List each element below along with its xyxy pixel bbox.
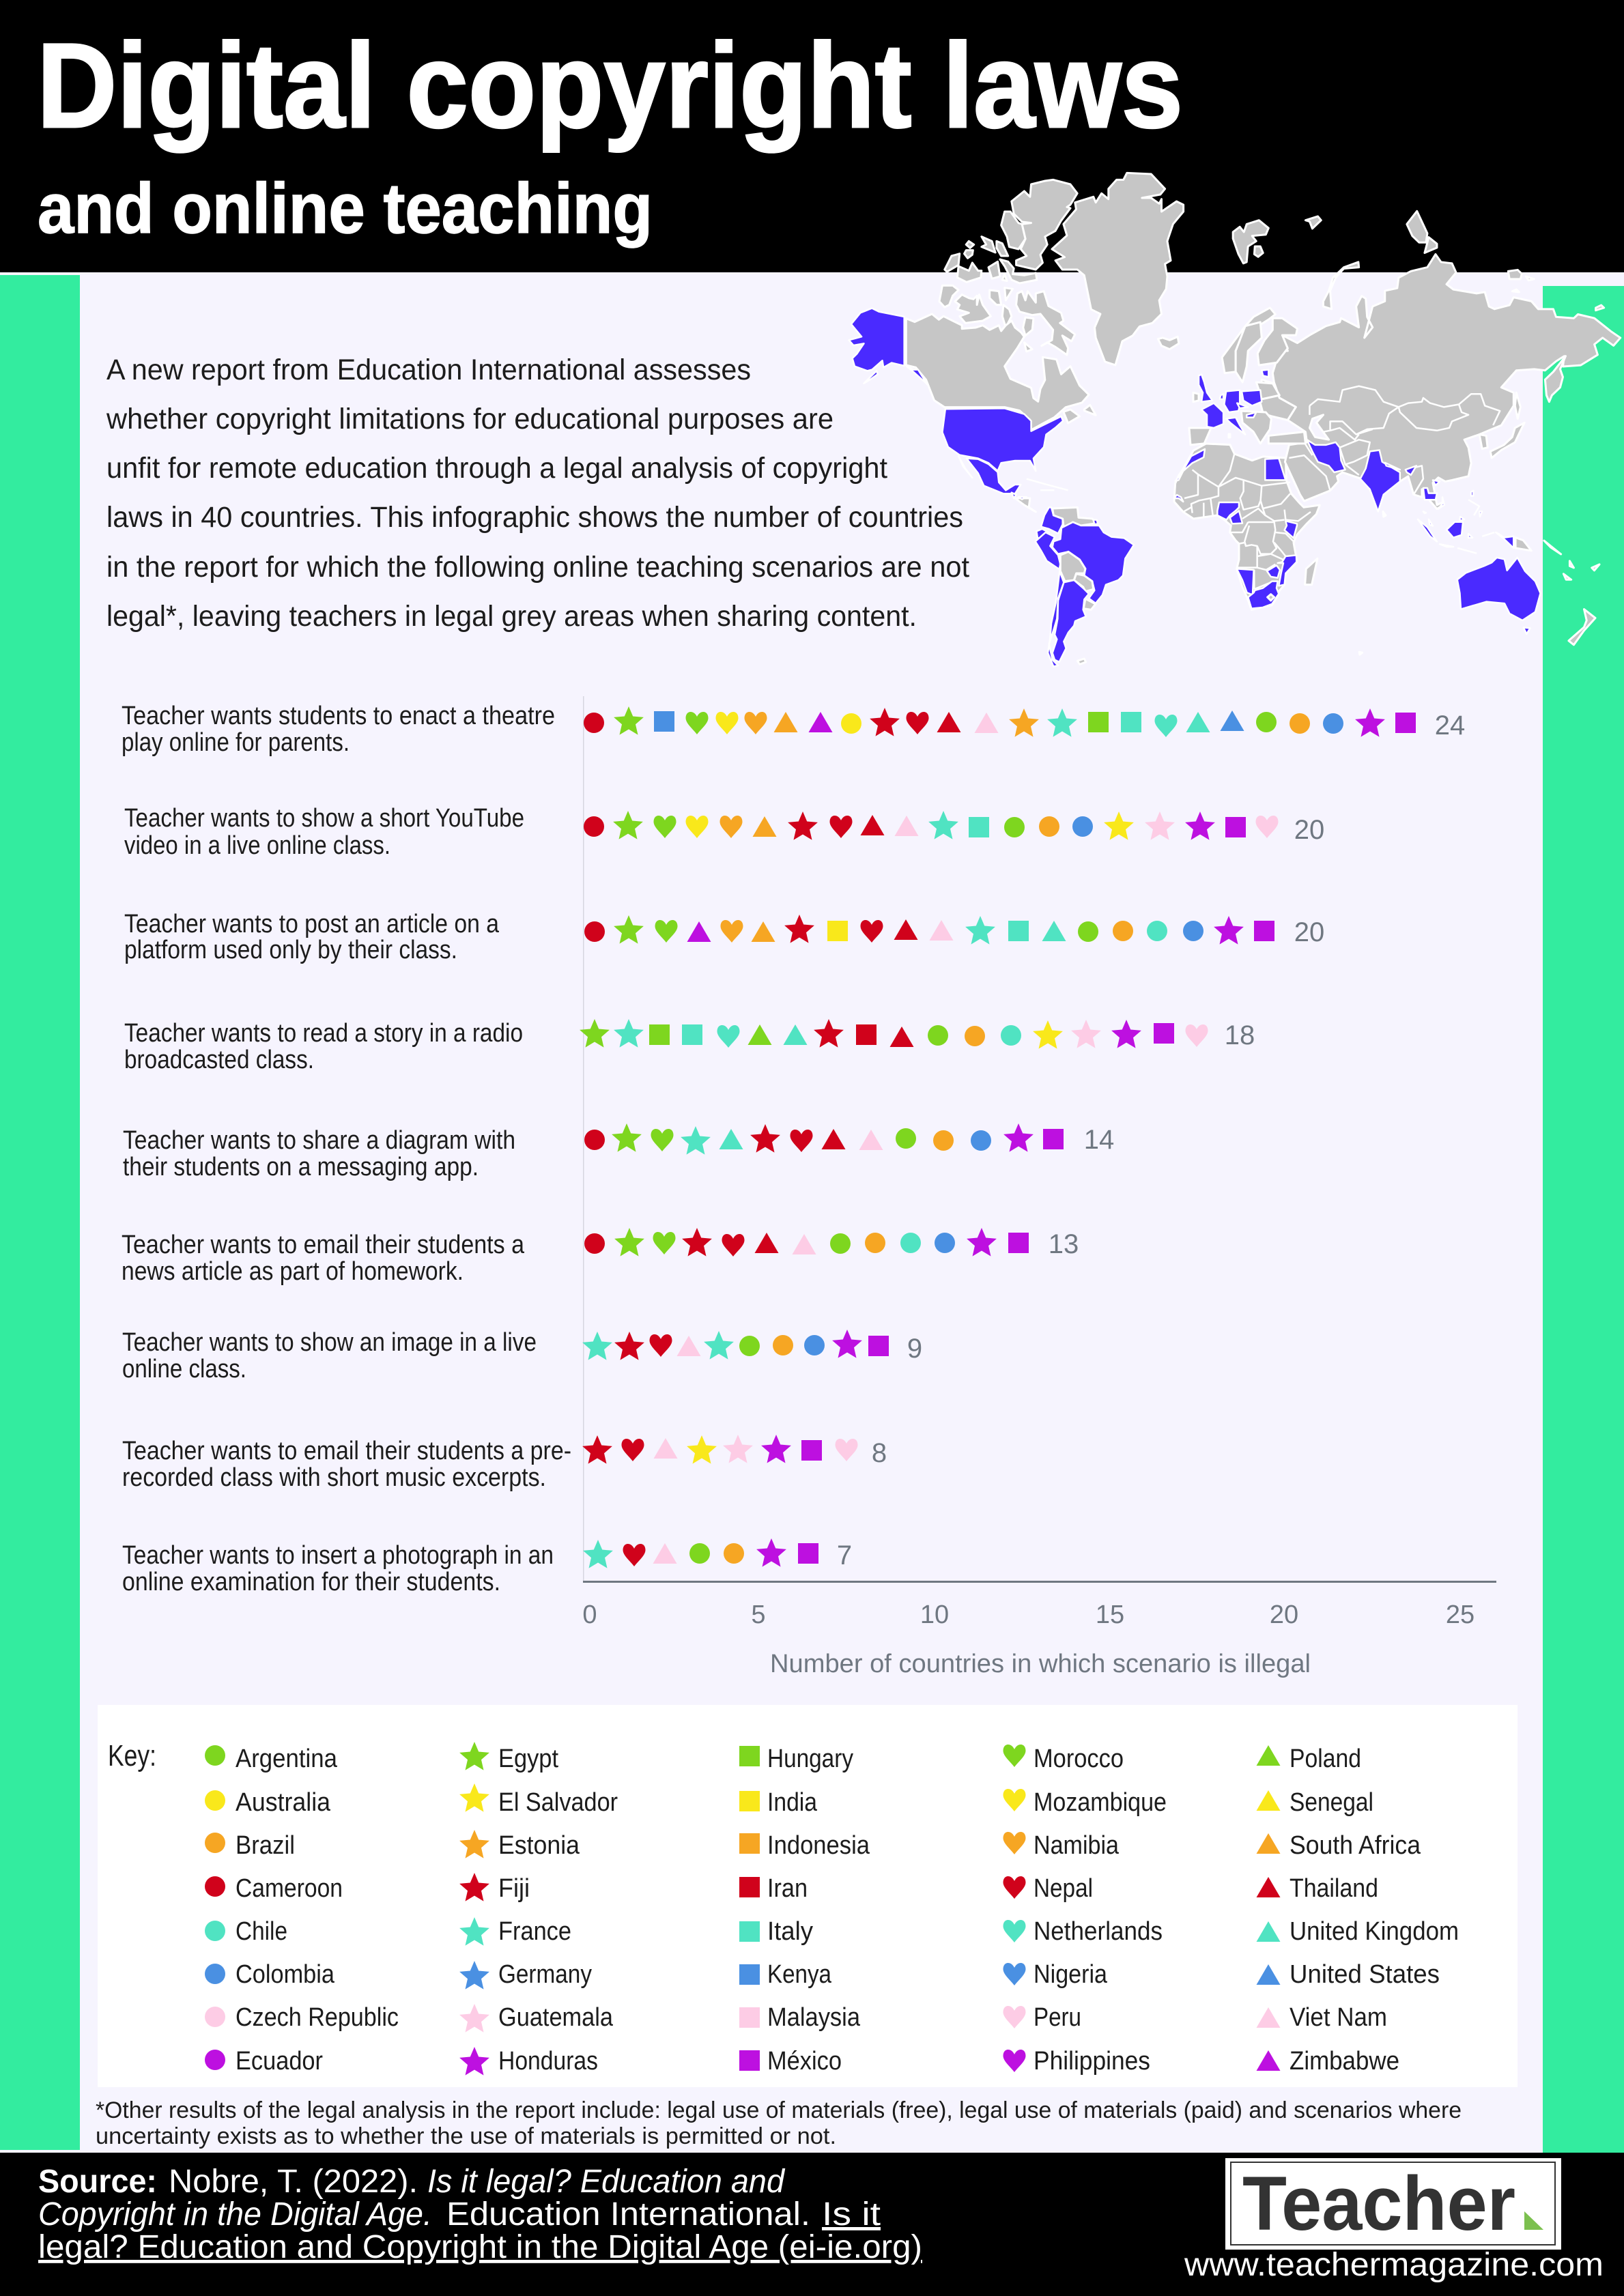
key column: stars: Estonia — [498, 1831, 580, 1860]
Eastern Europe — [1260, 379, 1296, 420]
Sweden — [1236, 322, 1262, 382]
Turkey — [1268, 432, 1305, 444]
row 4: 18 — [1225, 1020, 1255, 1050]
key column: squares: Malaysia — [767, 2003, 861, 2032]
Australia — [1457, 558, 1541, 620]
Spain and Portugal — [1189, 428, 1211, 445]
right green bar — [1543, 286, 1624, 2153]
UK — [1199, 375, 1212, 402]
row 6: news article as part of homework. — [122, 1257, 464, 1286]
world map — [849, 173, 1621, 667]
intro text — [106, 354, 969, 633]
Teacher logo: Teacher — [1242, 2161, 1515, 2246]
row 9: Teacher wants to insert a photograph in an — [122, 1541, 554, 1570]
key column: stars — [459, 1742, 618, 2076]
row 1 — [122, 702, 1465, 757]
Zimbabwe — [1267, 565, 1280, 578]
row 5: Teacher wants to share a diagram with — [123, 1126, 515, 1155]
row 9 — [122, 1538, 852, 1596]
Thailand — [1423, 488, 1437, 500]
key column: circles: Cameroon — [236, 1874, 343, 1903]
Egypt — [1265, 459, 1285, 480]
Borneo — [1447, 517, 1464, 538]
Mexico — [967, 459, 1021, 493]
Viet Nam — [1433, 480, 1444, 509]
key column: hearts: Netherlands — [1034, 1917, 1163, 1946]
key column: triangles: Thailand — [1290, 1874, 1378, 1903]
footnote: *Other results of the legal analysis in the report include: legal use of materials (free), legal use of materials (paid) and scenarios where — [96, 2097, 1462, 2123]
New Guinea east — [1515, 538, 1531, 551]
Senegal — [1174, 495, 1183, 502]
x axis ticks: 15 — [1096, 1601, 1124, 1629]
key column: circles — [205, 1745, 399, 2076]
row 7: Teacher wants to show an image in a live — [122, 1328, 537, 1357]
Guatemala — [1012, 493, 1016, 498]
key column: squares: Italy — [767, 1917, 813, 1946]
Morocco — [1176, 449, 1205, 481]
key column: triangles: United States — [1290, 1960, 1440, 1989]
key column: triangles: Poland — [1290, 1745, 1361, 1773]
row 2: video in a live online class. — [124, 831, 390, 860]
Alaska — [849, 308, 904, 384]
Japan — [1490, 422, 1524, 458]
Russia and Asia landmass — [1272, 254, 1621, 511]
Sakhalin — [1515, 392, 1520, 419]
left green bar — [0, 275, 80, 2150]
key heading: Key: — [108, 1739, 156, 1773]
key column: squares: Indonesia — [767, 1831, 870, 1860]
key column: stars: El Salvador — [498, 1788, 618, 1817]
source text: Source: — [38, 2164, 157, 2200]
footer band — [0, 2153, 1624, 2296]
row 9: 7 — [837, 1540, 852, 1570]
key column: triangles: South Africa — [1290, 1831, 1421, 1860]
key column: circles: Czech Republic — [236, 2003, 399, 2032]
Central America — [1015, 498, 1036, 512]
Peru — [1036, 532, 1060, 569]
key column: stars: Guatemala — [498, 2003, 614, 2032]
Sulawesi — [1468, 534, 1472, 538]
row 6 — [122, 1228, 1079, 1286]
India — [1361, 450, 1400, 511]
row 4: broadcasted class. — [124, 1046, 314, 1074]
Iran — [1307, 440, 1345, 472]
Java — [1440, 544, 1453, 547]
key column: squares: Iran — [767, 1874, 808, 1903]
key column: circles: Ecuador — [236, 2047, 323, 2076]
Netherlands — [1220, 394, 1223, 399]
Poland — [1242, 390, 1262, 405]
row 3: Teacher wants to post an article on a — [124, 910, 500, 938]
Devon Island — [1001, 212, 1025, 249]
row 1: 24 — [1435, 711, 1465, 741]
row 5: their students on a messaging app. — [123, 1153, 479, 1181]
row 3 — [124, 910, 1324, 964]
key column: hearts: Philippines — [1034, 2047, 1150, 2076]
Hungary — [1247, 412, 1256, 418]
Alaska panhandle — [907, 367, 927, 384]
intro text: whether copyright limitations for educational purposes are — [106, 403, 834, 435]
Pacific islands — [1359, 541, 1599, 655]
y axis line — [583, 696, 584, 1582]
key column: stars: Fiji — [498, 1874, 530, 1903]
Indonesian island outlines — [1457, 500, 1494, 554]
website url: www.teachermagazine.com — [1184, 2247, 1604, 2283]
Bangladesh region — [1406, 465, 1416, 475]
France — [1201, 403, 1223, 428]
row 5: 14 — [1084, 1125, 1114, 1155]
Mozambique — [1278, 555, 1296, 586]
row 2: Teacher wants to show a short YouTube — [124, 804, 524, 833]
source text: legal? Education and Copyright in the Digital Age (ei-ie.org) — [38, 2229, 922, 2265]
Norway — [1222, 308, 1275, 373]
row 7: online class. — [122, 1355, 246, 1383]
Honduras — [1018, 497, 1027, 500]
Arctic archipelago — [939, 237, 1075, 355]
x axis ticks: 10 — [920, 1601, 949, 1629]
Namibia — [1237, 569, 1254, 595]
Korea — [1479, 435, 1487, 449]
Uruguay — [1083, 599, 1096, 609]
Madagascar — [1305, 558, 1317, 585]
key column: squares: India — [767, 1788, 818, 1817]
intro text: in the report for which the following online teaching scenarios are not — [106, 551, 969, 584]
header band — [0, 0, 1624, 272]
footnote — [96, 2097, 1462, 2149]
source text: Education International. — [446, 2196, 810, 2233]
Tasmania — [1524, 627, 1530, 634]
Sri Lanka — [1383, 511, 1386, 517]
intro text: laws in 40 countries. This infographic shows the number of countries — [106, 501, 963, 534]
row 1: Teacher wants students to enact a theatre — [122, 702, 555, 730]
source text: Copyright in the Digital Age. — [38, 2196, 432, 2233]
Venezuela and Guianas — [1053, 507, 1097, 528]
row 9: online examination for their students. — [122, 1568, 500, 1596]
Falklands — [1077, 659, 1086, 664]
Paraguay — [1074, 574, 1094, 592]
key column: hearts: Morocco — [1034, 1745, 1124, 1773]
key column: hearts: Nigeria — [1034, 1960, 1108, 1989]
Iceland — [1158, 336, 1179, 349]
row 2 — [124, 804, 1324, 860]
Caspian Sea — [1309, 415, 1329, 440]
key column: hearts: Nepal — [1034, 1874, 1093, 1903]
Malaysia — [1423, 511, 1433, 526]
row 6: 13 — [1049, 1229, 1079, 1259]
Argentina — [1053, 580, 1089, 662]
intro text: A new report from Education International assesses — [106, 354, 751, 386]
source text: Is it — [822, 2196, 881, 2233]
key column: hearts: Peru — [1034, 2003, 1081, 2032]
intro text: legal*, leaving teachers in legal grey areas when sharing content. — [106, 600, 917, 633]
key column: triangles — [1256, 1745, 1459, 2076]
Ellesmere Island — [1012, 180, 1077, 270]
chart — [122, 696, 1496, 1678]
row 3: platform used only by their class. — [124, 936, 457, 964]
Balkans — [1241, 411, 1271, 444]
x axis title: Number of countries in which scenario is illegal — [770, 1650, 1311, 1678]
key column: triangles: Zimbabwe — [1290, 2047, 1399, 2076]
Philippines — [1471, 491, 1482, 517]
Brazil — [1053, 522, 1134, 603]
x axis ticks: 5 — [751, 1601, 766, 1629]
row 8: Teacher wants to email their students a pre- — [122, 1437, 571, 1465]
row 4: Teacher wants to read a story in a radio — [124, 1019, 523, 1048]
key panel — [98, 1705, 1518, 2087]
row 8: recorded class with short music excerpts. — [122, 1463, 546, 1492]
row 5 — [123, 1123, 1114, 1181]
x axis ticks — [582, 1601, 1475, 1629]
USA — [942, 408, 1063, 471]
New Zealand — [1569, 609, 1595, 645]
subtitle: and online teaching — [38, 169, 653, 248]
Canada — [906, 314, 1089, 430]
row 7: 9 — [907, 1334, 922, 1364]
Italy — [1226, 418, 1245, 437]
map: Oceania — [1359, 541, 1599, 655]
source text — [38, 2164, 922, 2265]
map: North America and Greenland — [849, 173, 1184, 512]
row 8: 8 — [872, 1438, 887, 1468]
footnote: uncertainty exists as to whether the use of materials is permitted or not. — [96, 2123, 836, 2149]
Sumatra — [1418, 519, 1437, 541]
Finland — [1257, 318, 1297, 365]
source text: Is it legal? Education and — [427, 2164, 785, 2200]
Severnaya Zemlya — [1407, 211, 1437, 253]
key column: squares — [739, 1745, 870, 2076]
source text: Nobre, T. (2022). — [169, 2164, 418, 2200]
intro text: unfit for remote education through a legal analysis of copyright — [106, 452, 887, 485]
key column: circles: Chile — [236, 1917, 287, 1946]
key column: triangles: United Kingdom — [1290, 1917, 1459, 1946]
Kamchatka — [1545, 356, 1565, 402]
key column: squares: México — [767, 2047, 842, 2076]
key column: hearts: Namibia — [1034, 1831, 1120, 1860]
Czech Republic — [1237, 403, 1248, 408]
Nigeria — [1217, 502, 1239, 520]
Greenland — [1052, 173, 1184, 365]
title: Digital copyright laws — [37, 19, 1183, 153]
key column: triangles: Viet Nam — [1290, 2003, 1387, 2032]
map: Africa and South America — [1036, 444, 1320, 667]
French Guiana region — [1094, 520, 1098, 524]
key column: stars: Egypt — [498, 1745, 558, 1773]
Germany — [1224, 390, 1240, 412]
row 4 — [124, 1019, 1255, 1074]
key column: stars: France — [498, 1917, 571, 1946]
Baja California — [958, 456, 972, 478]
Asian borders — [1289, 386, 1500, 495]
row 6: Teacher wants to email their students a — [122, 1231, 525, 1259]
New Siberian Islands — [1508, 270, 1604, 311]
key column: stars: Germany — [498, 1960, 592, 1989]
Kenya — [1285, 521, 1297, 538]
Cameroon — [1230, 511, 1242, 523]
New Guinea west — [1496, 532, 1513, 548]
Lesotho — [1268, 594, 1274, 601]
key column: hearts: Mozambique — [1034, 1788, 1167, 1817]
map: Eurasia — [1189, 211, 1621, 554]
Africa landmass — [1174, 444, 1320, 609]
row 2: 20 — [1294, 815, 1324, 845]
key column: squares: Kenya — [767, 1960, 832, 1989]
key column: hearts — [1003, 1745, 1167, 2076]
key column: circles: Brazil — [236, 1831, 295, 1860]
Svalbard and Franz Josef Land — [1233, 216, 1321, 263]
Caribbean — [1027, 479, 1068, 490]
key column: circles: Colombia — [236, 1960, 335, 1989]
key column: stars: Honduras — [498, 2047, 598, 2076]
Estonia — [1262, 370, 1268, 377]
Atlantic Canada islands — [1064, 405, 1096, 423]
South Africa — [1248, 582, 1279, 609]
x axis line — [583, 1581, 1496, 1583]
Chile — [1048, 571, 1064, 667]
x axis ticks: 20 — [1270, 1601, 1298, 1629]
Ireland — [1193, 392, 1199, 402]
x axis ticks: 0 — [582, 1601, 597, 1629]
x axis ticks: 25 — [1446, 1601, 1475, 1629]
row 8 — [122, 1435, 887, 1492]
Bolivia — [1060, 551, 1085, 582]
key column: circles: Australia — [236, 1788, 331, 1817]
Ecuador — [1036, 529, 1049, 538]
key column: circles: Argentina — [236, 1745, 338, 1773]
Baltics and Belarus — [1256, 382, 1279, 399]
key column: squares: Hungary — [767, 1745, 853, 1773]
row 7 — [122, 1328, 922, 1383]
African borders — [1183, 454, 1311, 589]
Nepal — [1385, 463, 1400, 470]
Colombia — [1041, 507, 1063, 534]
key column: triangles: Senegal — [1290, 1788, 1373, 1817]
row 3: 20 — [1294, 917, 1324, 947]
row 1: play online for parents. — [122, 728, 350, 757]
Novaya Zemlya — [1324, 262, 1359, 309]
